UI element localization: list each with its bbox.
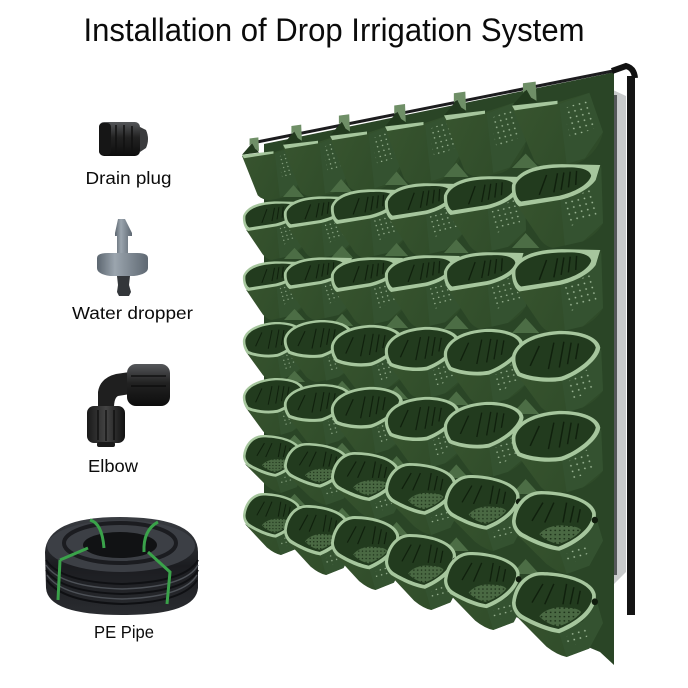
backing frame [264,72,614,665]
green wall planter assembly [242,66,635,665]
icon: water dropper [97,219,148,296]
label: water dropper: Water dropper [72,303,193,323]
planter row 1 [242,82,603,200]
icon: PE pipe coil [45,517,198,615]
planter row 5 [243,378,603,494]
planter row 7 [243,493,603,657]
black top water pipe with elbow [257,66,635,142]
planter row 6 [243,435,603,574]
label: elbow: Elbow [88,456,138,476]
planter row 4 [243,320,603,414]
planter row 2 [243,164,603,260]
label: drain plug: Drain plug [86,168,172,188]
icon: elbow [87,364,170,447]
black vertical water pipe [627,76,635,615]
planter row 3 [243,249,603,333]
panel: silver backing plate [613,90,626,585]
label: PE pipe: PE Pipe [94,622,154,642]
icon: drain plug [99,122,148,156]
title: Installation of Drop Irrigation System [84,12,584,48]
